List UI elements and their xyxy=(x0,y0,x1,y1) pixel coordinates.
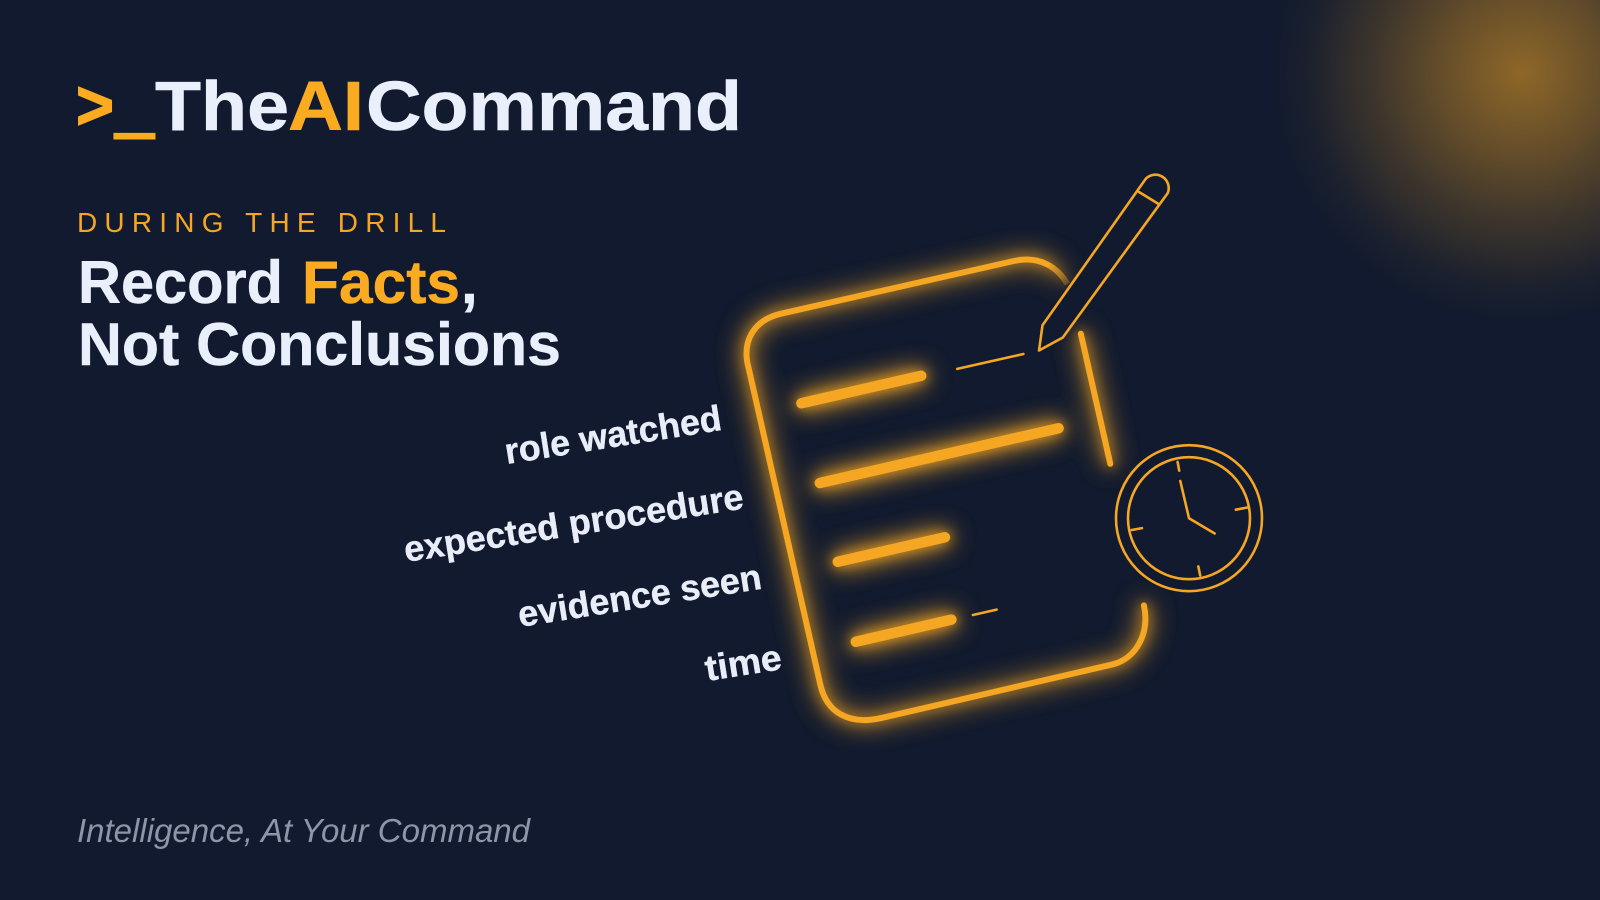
eyebrow: during the drill: DURING THE DRILL xyxy=(77,207,446,238)
tagline: Intelligence, At Your Command xyxy=(77,812,532,849)
labels: facts to record: time xyxy=(702,636,784,689)
amber glow top right xyxy=(1240,0,1600,340)
icon: glowing document xyxy=(747,260,1145,720)
labels: facts to record: evidence seen xyxy=(515,556,764,635)
headline: Record xyxy=(78,249,283,316)
labels: facts to record xyxy=(401,397,784,689)
logo xyxy=(76,66,742,145)
headline xyxy=(78,249,561,378)
headline: , xyxy=(461,249,478,316)
logo: Command xyxy=(366,67,742,145)
logo: AI xyxy=(288,67,364,145)
logo: > xyxy=(76,66,114,144)
icon: clock xyxy=(1116,445,1262,591)
headline: Not Conclusions xyxy=(78,311,561,378)
icon: pen and written strokes xyxy=(957,175,1169,615)
logo: _ xyxy=(115,66,154,144)
labels: facts to record: role watched xyxy=(502,397,724,472)
headline: Facts xyxy=(302,249,460,316)
logo: The xyxy=(155,67,289,145)
labels: facts to record: expected procedure xyxy=(401,476,746,570)
